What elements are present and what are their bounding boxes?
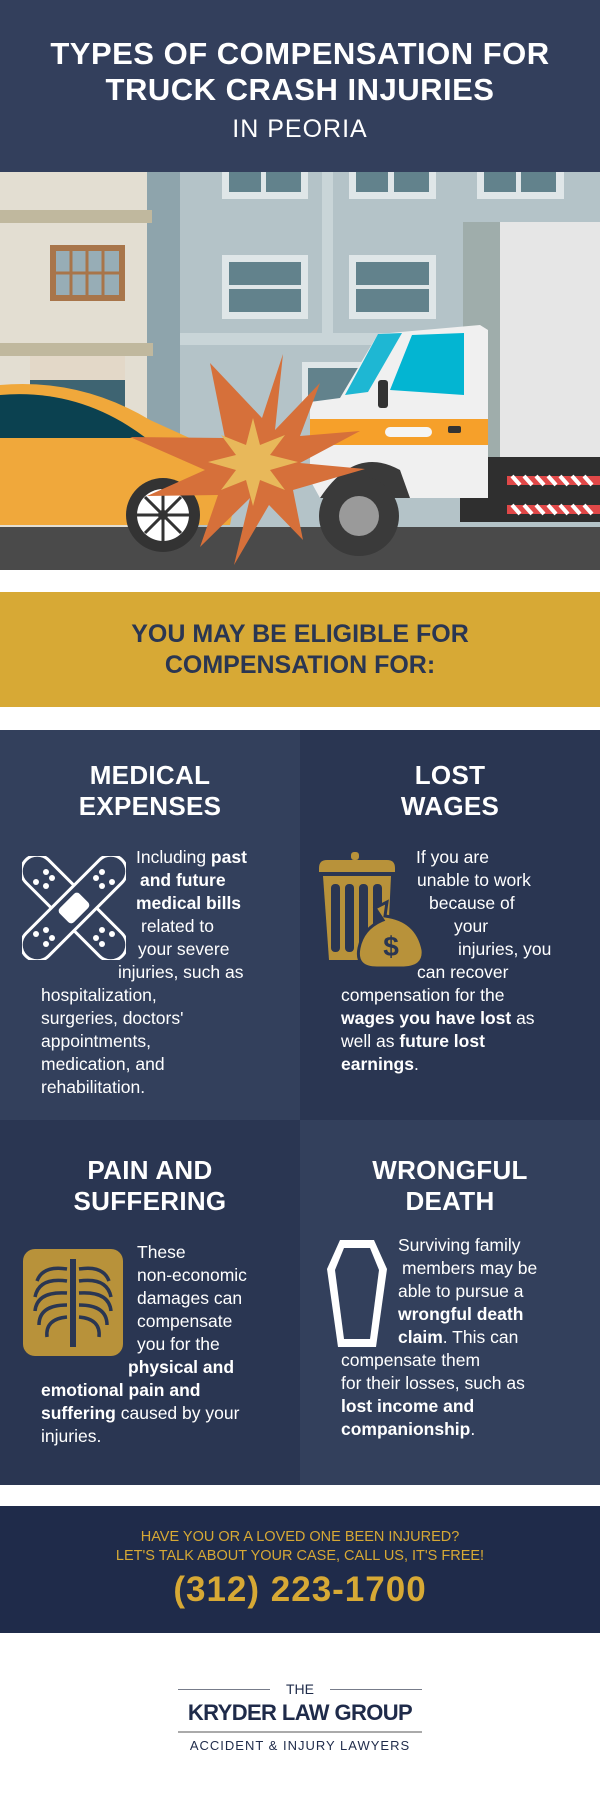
logo: THE (286, 1681, 314, 1697)
panel: pain and suffering (0, 1120, 300, 1485)
heading: pain and suffering (74, 1155, 226, 1216)
logo: KRYDER LAW GROUP (188, 1700, 412, 1725)
cta text: HAVE YOU OR A LOVED ONE BEEN INJURED? (141, 1529, 459, 1545)
title: TRUCK CRASH INJURIES (106, 72, 494, 107)
heading: medical expenses (79, 760, 221, 821)
logo: ACCIDENT & INJURY LAWYERS (190, 1738, 410, 1753)
banner heading (131, 620, 469, 679)
panel: wrongful death (300, 1120, 600, 1485)
icon: coffin (327, 1240, 387, 1347)
heading: lost wages: LOST (415, 760, 485, 790)
text: pain: These (137, 1242, 186, 1262)
text: wrongful death: members may be (402, 1258, 537, 1278)
heading: wrongful death: DEATH (405, 1186, 495, 1216)
text: lost wages: unable to work (417, 870, 531, 890)
text: medical (41, 847, 247, 1097)
text: medical: rehabilitation. (41, 1077, 145, 1097)
text: medical: Including past (136, 847, 247, 867)
heading: wrongful death (372, 1155, 528, 1216)
text: medical: appointments, (41, 1031, 151, 1051)
text: lost wages: your (454, 916, 488, 936)
heading: medical expenses: MEDICAL (90, 760, 210, 790)
panel: medical expenses (0, 730, 300, 1120)
panel: lost wages (300, 730, 600, 1120)
text: pain: emotional pain and (41, 1380, 200, 1400)
heading: lost wages (400, 760, 499, 821)
text: lost wages: If you are (416, 847, 489, 867)
text: lost wages: injuries, you (458, 939, 551, 959)
text: pain: injuries. (41, 1426, 101, 1446)
heading: lost wages: WAGES (401, 791, 499, 821)
text: wrongful death (341, 1235, 537, 1439)
text: wrongful death: companionship. (341, 1419, 475, 1439)
phone number: (312) 223-1700 (173, 1570, 427, 1609)
banner heading: COMPENSATION FOR: (165, 651, 435, 679)
icon: bandages (22, 856, 126, 960)
icon: trash can and money bag: $ (383, 931, 399, 962)
text: lost wages: because of (429, 893, 515, 913)
text: wrongful death: able to pursue a (398, 1281, 524, 1301)
heading: wrongful death: WRONGFUL (372, 1155, 528, 1185)
text: wrongful death: for their losses, such as (341, 1373, 525, 1393)
text: pain: non-economic (137, 1265, 247, 1285)
text: medical: medication, and (41, 1054, 165, 1074)
text: lost wages (341, 847, 551, 1074)
text: pain: suffering caused by your (41, 1403, 239, 1423)
text: pain: you for the (137, 1334, 220, 1354)
call to action (0, 1506, 600, 1633)
heading: pain and suffering: SUFFERING (74, 1186, 226, 1216)
text: wrongful death: lost income and (341, 1396, 474, 1416)
icon: trash can and money bag (319, 852, 422, 966)
text: pain: physical and (128, 1357, 234, 1377)
cta text (116, 1529, 484, 1564)
text: medical: and future (140, 870, 226, 890)
banner heading: YOU MAY BE ELIGIBLE FOR (131, 620, 469, 648)
illustration: truck crash (0, 172, 600, 570)
text: lost wages: earnings. (341, 1054, 419, 1074)
text: lost wages: can recover (417, 962, 508, 982)
logo (178, 1681, 422, 1753)
text: lost wages: wages you have lost as (341, 1008, 535, 1028)
subtitle: IN PEORIA (232, 115, 368, 143)
text: wrongful death: wrongful death (398, 1304, 523, 1324)
text: medical: medical bills (136, 893, 241, 913)
text: medical: surgeries, doctors' (41, 1008, 183, 1028)
heading: pain and suffering: PAIN AND (87, 1155, 213, 1185)
header (0, 0, 600, 172)
text: lost wages: compensation for the (341, 985, 504, 1005)
text: wrongful death: claim. This can (398, 1327, 518, 1347)
text: medical: your severe (138, 939, 229, 959)
text: wrongful death: Surviving family (398, 1235, 521, 1255)
heading: medical expenses: EXPENSES (79, 791, 221, 821)
text: wrongful death: compensate them (341, 1350, 480, 1370)
text: medical: injuries, such as (118, 962, 243, 982)
text: medical: hospitalization, (41, 985, 157, 1005)
title (50, 36, 550, 107)
text: pain (41, 1242, 247, 1446)
text: lost wages: well as future lost (341, 1031, 485, 1051)
text: pain: compensate (137, 1311, 232, 1331)
banner: eligibility (0, 592, 600, 707)
cta text: LET'S TALK ABOUT YOUR CASE, CALL US, IT'S FREE! (116, 1548, 484, 1564)
text: medical: related to (141, 916, 214, 936)
icon: ribcage x-ray (23, 1249, 123, 1356)
title: TYPES OF COMPENSATION FOR (50, 36, 550, 71)
text: pain: damages can (137, 1288, 242, 1308)
